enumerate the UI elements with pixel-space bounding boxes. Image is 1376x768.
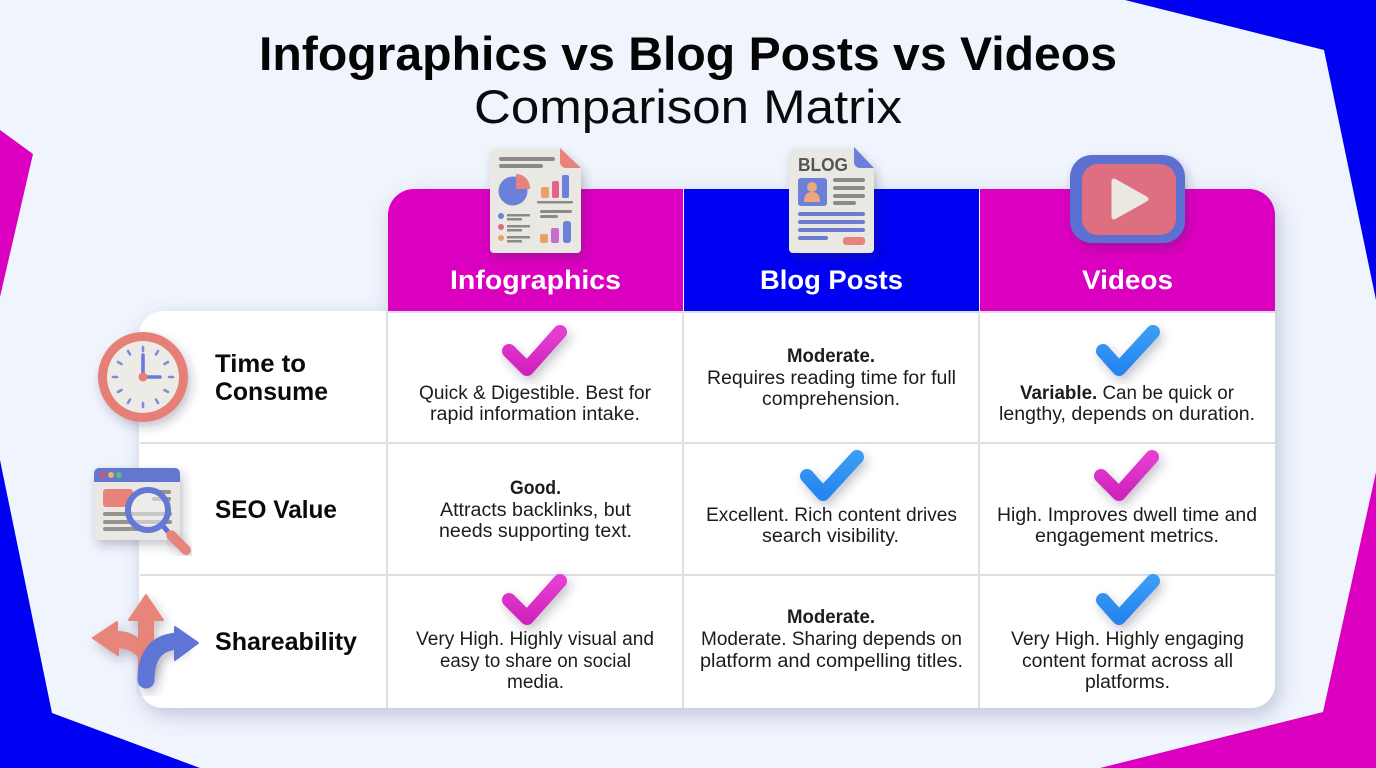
icon: blue check [1103, 581, 1153, 618]
cell text [999, 383, 1255, 425]
cell: infographics seo: Good. [510, 478, 561, 499]
cell text: Variable. Can be quick or [1020, 383, 1235, 404]
cell: blog posts shareability [700, 607, 963, 672]
cell text: rapid information intake. [430, 404, 640, 425]
cell: infographics seo [439, 478, 632, 542]
icon: clock [98, 332, 188, 422]
header: blog posts [684, 189, 979, 311]
icon: blog document: BLOG [798, 155, 848, 175]
icon: blue check [1103, 332, 1153, 369]
corner shape: bottom right magenta [1100, 472, 1376, 768]
cell: blog posts shareability: Moderate. Sharing depends on [701, 629, 962, 650]
cell: blog posts shareability: platform and compelling titles. [700, 651, 963, 672]
row label: time to consume: Time to [215, 350, 306, 378]
cell text [419, 383, 652, 425]
cell text [1011, 629, 1244, 693]
header: infographics [388, 189, 683, 311]
cell text: media. [507, 672, 564, 693]
cell text: content format across all [1022, 651, 1233, 672]
cell: blog posts shareability: Moderate. [787, 607, 875, 628]
cell text [706, 505, 957, 547]
cell text: platforms. [1085, 672, 1170, 693]
icon: magenta check [509, 332, 560, 369]
header label: infographics: Infographics [450, 265, 621, 295]
icon: infographic document [490, 148, 581, 253]
icon: magenta check [1101, 457, 1152, 494]
header label: videos: Videos [1082, 265, 1173, 295]
cell: videos shareability [1011, 581, 1244, 693]
header label: blog posts: Blog Posts [760, 265, 903, 295]
cell: infographics seo: Attracts backlinks, but [440, 500, 632, 521]
row label: seo value: SEO Value [215, 496, 337, 524]
title [259, 27, 1117, 133]
icon: branching arrows [93, 595, 198, 680]
cell: videos seo [997, 457, 1257, 547]
cell text: engagement metrics. [1035, 526, 1219, 547]
corner shape: left magenta [0, 130, 33, 297]
cell text [997, 505, 1257, 547]
row label: time to consume [215, 350, 328, 406]
corner shape: top right blue [1125, 0, 1376, 300]
cell: infographics shareability [416, 581, 654, 693]
cell text: Very High. Highly engaging [1011, 629, 1244, 650]
cell text: Very High. Highly visual and [416, 629, 654, 650]
title line 1: Infographics vs Blog Posts vs Videos [259, 27, 1117, 80]
cell: blog posts time: Moderate. [787, 346, 875, 367]
cell text: easy to share on social [440, 651, 631, 672]
cell: blog posts time: comprehension. [762, 389, 900, 410]
icon: blue check [807, 457, 857, 494]
corner shape: bottom left blue [0, 460, 200, 768]
header: videos [980, 189, 1275, 311]
cell text: Quick & Digestible. Best for [419, 383, 652, 404]
cell text [416, 629, 654, 693]
cell: blog posts seo [706, 457, 957, 547]
icon: magenta check [509, 581, 560, 618]
row label: shareability: Shareability [215, 628, 357, 656]
title line 2: Comparison Matrix [474, 80, 902, 133]
table card shadow shape [139, 189, 1275, 708]
cell: videos time [999, 332, 1255, 425]
comparison table [139, 189, 1275, 708]
row label: time to consume: Consume [215, 378, 328, 406]
icon: video play button [1070, 155, 1185, 243]
icon: blog document [789, 147, 874, 253]
cell text: Excellent. Rich content drives [706, 505, 957, 526]
cell text: search visibility. [762, 526, 899, 547]
cell text: lengthy, depends on duration. [999, 404, 1255, 425]
cell: blog posts time: Requires reading time for full [707, 368, 956, 389]
cell: infographics time [419, 332, 652, 425]
cell text: High. Improves dwell time and [997, 505, 1257, 526]
cell: infographics seo: needs supporting text. [439, 521, 632, 542]
icon: seo browser and magnifier [94, 468, 186, 550]
cell: blog posts time [707, 346, 956, 410]
